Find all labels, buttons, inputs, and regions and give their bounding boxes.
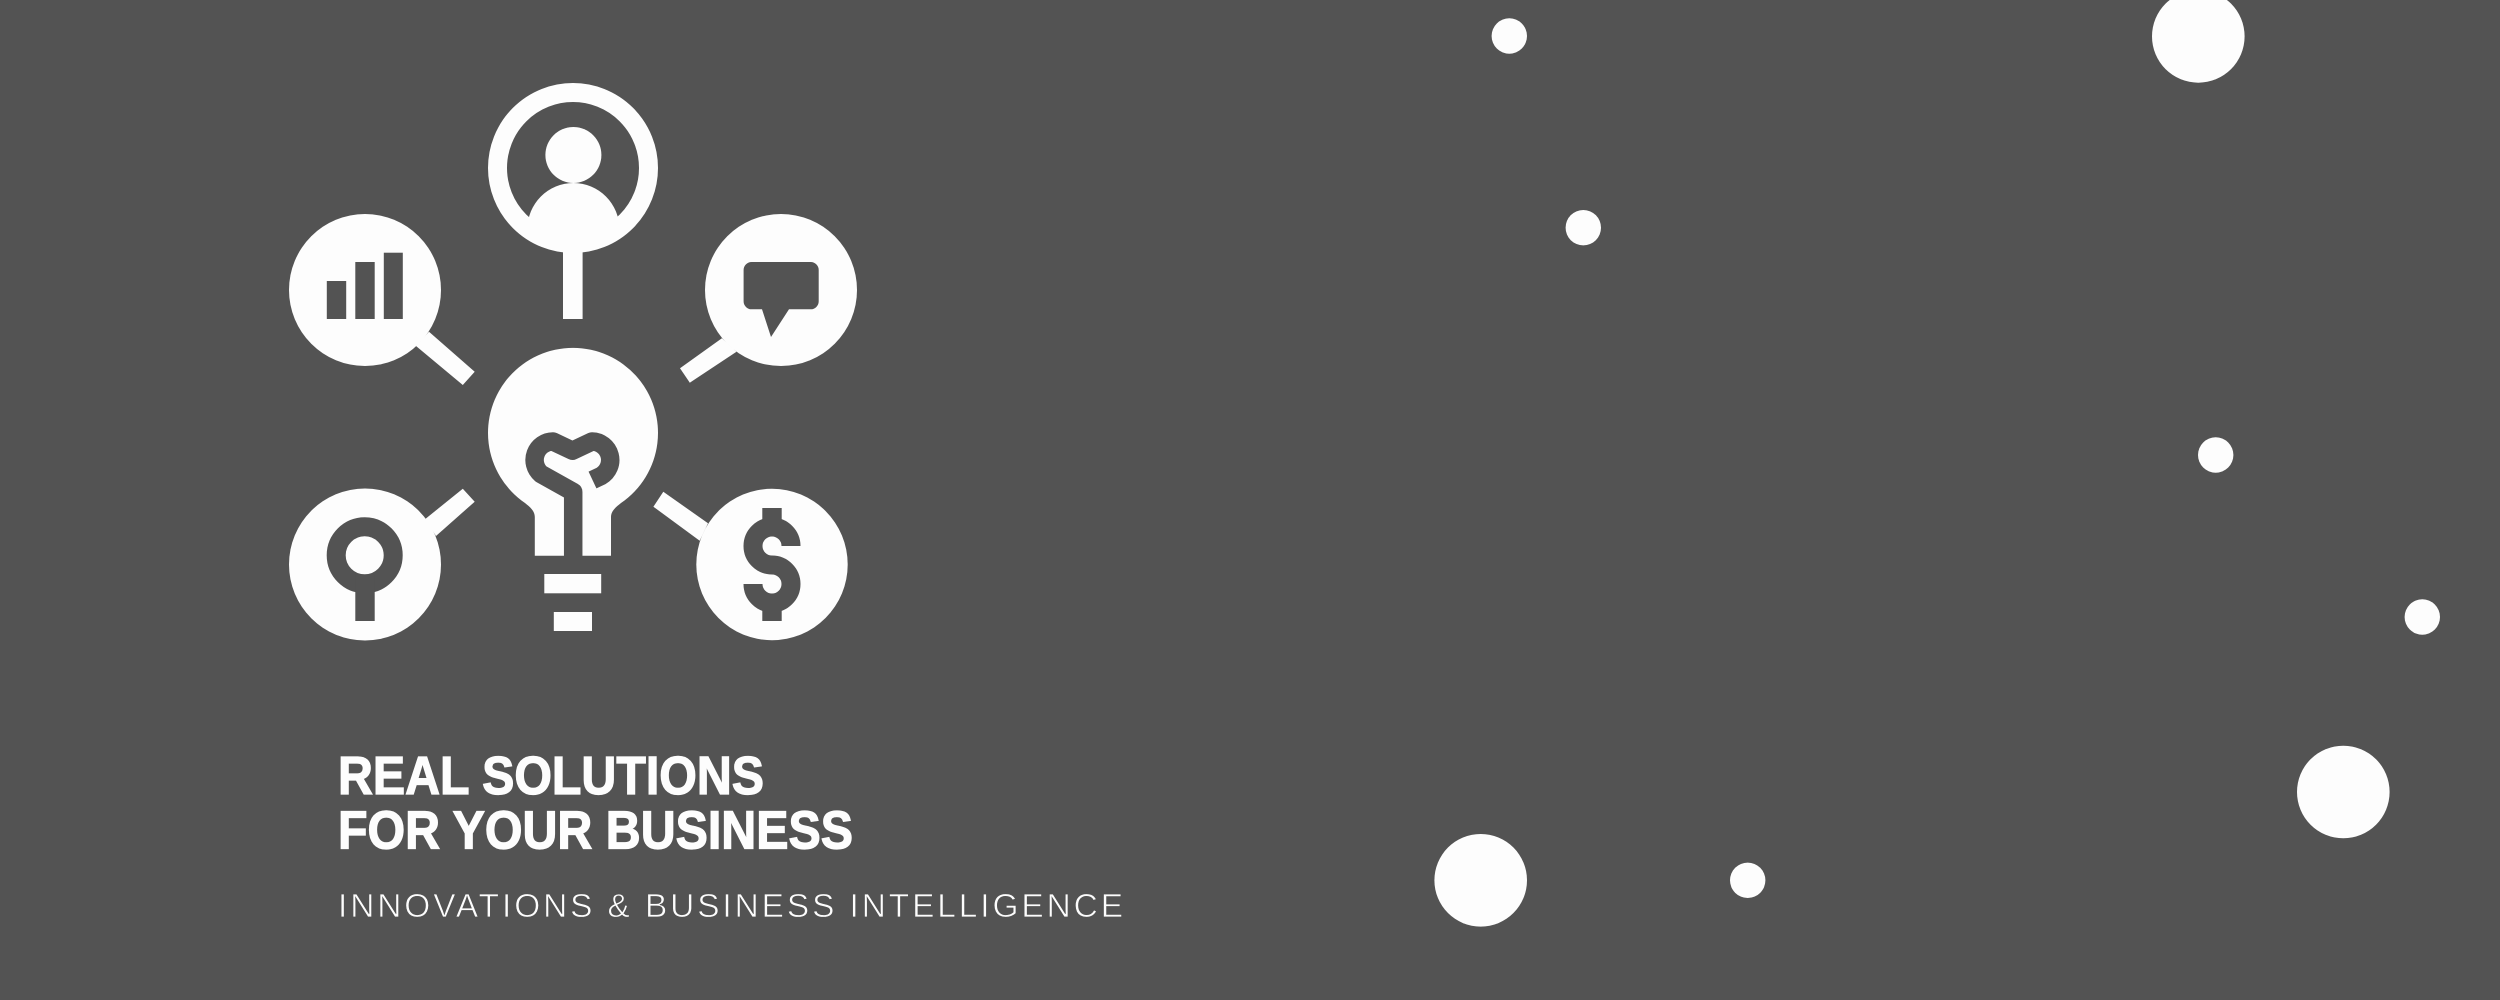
title: REAL SOLUTIONS (338, 746, 764, 806)
icon: central lightbulb (488, 348, 658, 631)
icon: bar chart magnifier (289, 214, 475, 385)
title (338, 746, 853, 860)
title: FOR YOUR BUSINESS (338, 800, 853, 860)
icon: key magnifier (289, 488, 475, 640)
graphic: lightbulb with magnifying glasses (289, 92, 857, 640)
icon: person magnifier (498, 92, 648, 319)
icon: dollar magnifier (653, 489, 848, 640)
decorative dots (1434, 0, 2440, 927)
subtitle: INNOVATIONS & BUSINESS INTELLIGENCE (338, 888, 1123, 925)
icon: speech bubble magnifier (680, 214, 857, 383)
